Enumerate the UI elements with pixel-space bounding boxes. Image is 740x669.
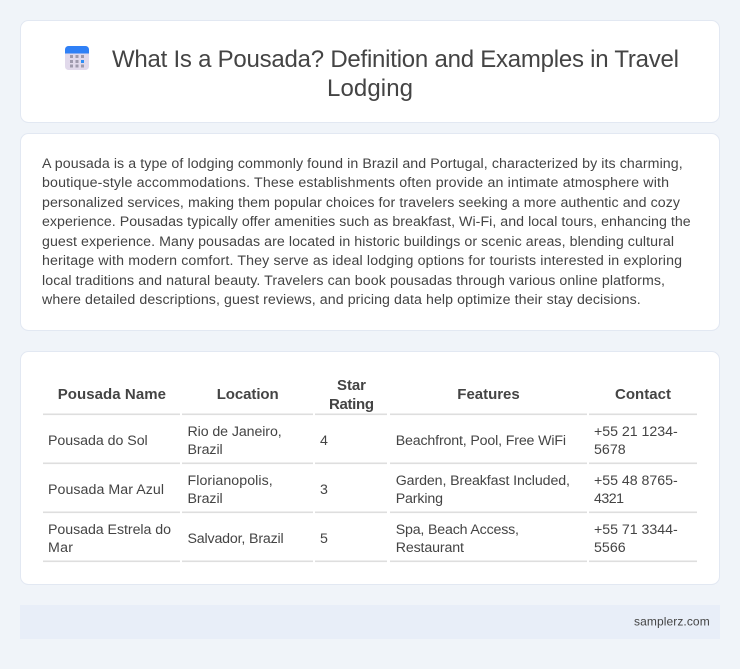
table row: Pousada do Sol: Rio de Janeiro, [188, 424, 282, 440]
panel: pousada table [20, 352, 720, 584]
panel: definition text: A pousada is a type of lodging commonly found in Brazil and Portugal, characterized by its charming, [42, 156, 683, 172]
table row: Pousada Mar Azul: 3 [320, 482, 328, 498]
table row: Pousada do Sol [48, 424, 678, 458]
table row: Pousada do Sol: Pousada do Sol [48, 433, 148, 449]
panel: definition text: experience. Pousadas typically offer amenities such as breakfast, Wi-Fi, and local tours, enhancing the [42, 214, 691, 230]
panel: definition text: heritage with modern comfort. They serve as ideal lodging options for tourists interested in exploring [42, 253, 682, 269]
table row: Pousada do Sol: Brazil [188, 442, 223, 458]
table row: Pousada Estrela do Mar: Salvador, Brazil [188, 531, 284, 547]
table row: Pousada Mar Azul: +55 48 8765- [594, 473, 678, 489]
panel: definition text: personalized services, making them popular choices for travelers seeking a more authentic and cozy [42, 195, 681, 211]
table row: Pousada Estrela do Mar: 5 [320, 531, 328, 547]
table row: Pousada Estrela do Mar: Restaurant [396, 540, 464, 556]
table header: Location [217, 386, 279, 403]
table row: Pousada Estrela do Mar: +55 71 3344- [594, 522, 678, 538]
table header [58, 377, 671, 413]
table row: Pousada Mar Azul: Garden, Breakfast Included, [396, 473, 570, 489]
table row: Pousada Mar Azul: Florianopolis, [188, 473, 273, 489]
title: Lodging [327, 75, 413, 102]
table header: Features [457, 386, 520, 403]
table header: Contact [615, 386, 671, 403]
footer: samplerz.com [634, 615, 710, 629]
table row: Pousada Mar Azul: 4321 [594, 491, 624, 507]
title [112, 46, 679, 102]
table row: Pousada Estrela do Mar [48, 522, 678, 556]
icon: calendar [65, 46, 89, 70]
table row: Pousada Mar Azul: Pousada Mar Azul [48, 482, 164, 498]
table row: Pousada do Sol: Beachfront, Pool, Free WiFi [396, 433, 566, 449]
table row: Pousada do Sol: 5678 [594, 442, 626, 458]
panel: definition text: boutique-style accommodations. These establishments often provide an intimate atmosphere with [42, 175, 669, 191]
table row: Pousada Estrela do Mar: Pousada Estrela do [48, 522, 171, 538]
table row: Pousada Mar Azul: Brazil [188, 491, 223, 507]
footer [20, 605, 720, 639]
table header: Rating [329, 396, 374, 413]
table row: Pousada Estrela do Mar: Mar [48, 540, 73, 556]
panel: definition text: guest experience. Many pousadas are located in historic buildings or scenic areas, blending cultural [42, 234, 674, 250]
table header: Star [337, 377, 366, 394]
panel: title card [20, 20, 720, 122]
table row: Pousada Mar Azul [48, 473, 678, 507]
title: What Is a Pousada? Definition and Examples in Travel [112, 46, 679, 73]
panel: definition text [20, 134, 720, 330]
table header: Pousada Name [58, 386, 166, 403]
panel: definition text: where detailed descriptions, guest reviews, and pricing data help optimize their stay decisions. [41, 292, 641, 308]
table row: Pousada Estrela do Mar: 5566 [594, 540, 626, 556]
table row: Pousada do Sol: 4 [320, 433, 328, 449]
table row: Pousada Mar Azul: Parking [396, 491, 443, 507]
table row: Pousada do Sol: +55 21 1234- [594, 424, 678, 440]
table row: Pousada Estrela do Mar: Spa, Beach Access, [396, 522, 519, 538]
panel: definition text: local traditions and natural beauty. Travelers can book pousadas through various online platforms, [42, 273, 665, 289]
